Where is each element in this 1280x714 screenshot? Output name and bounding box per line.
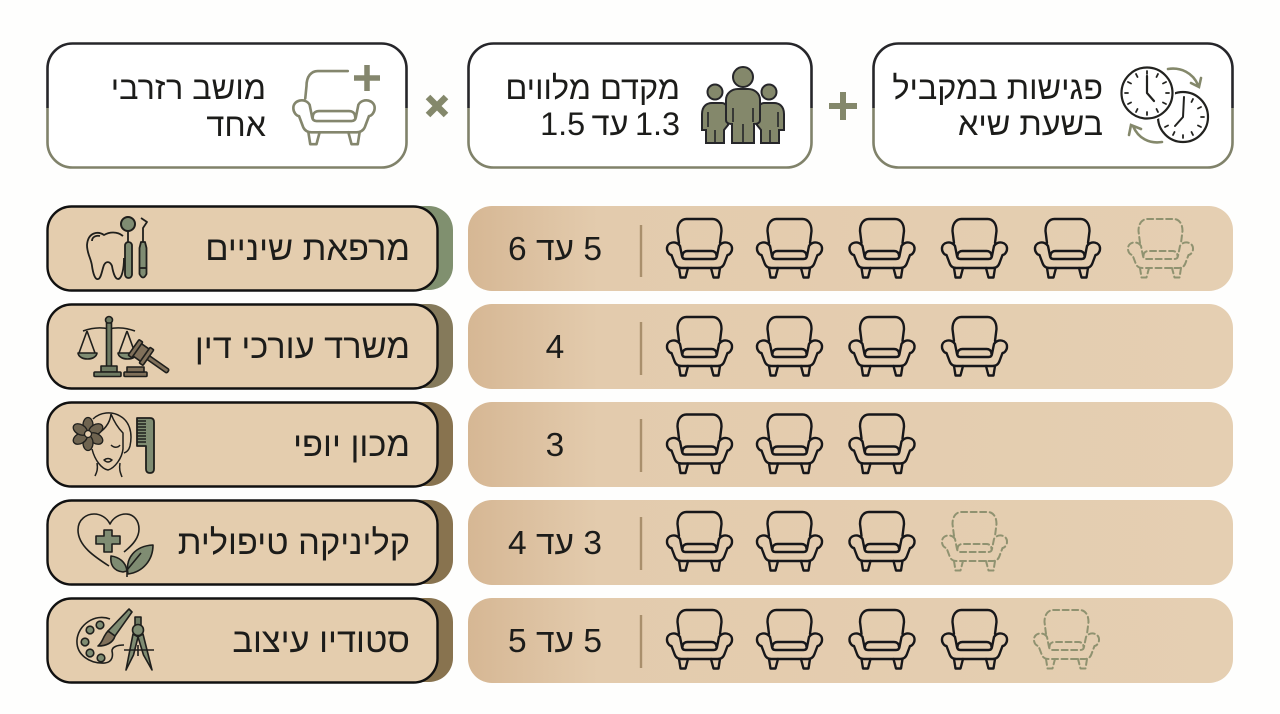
label card: dental clinic: מרפאת שיניים (205, 230, 410, 268)
text: escort factor (505, 70, 680, 142)
panel: parallel meetings (874, 44, 1232, 168)
text: parallel meetings: בשעת שיא (958, 106, 1103, 142)
icon: scales and gavel (78, 316, 173, 379)
value panel: law office: 4 (546, 329, 564, 366)
label card: law office: משרד עורכי דין (195, 328, 410, 366)
icon: palette and compass (77, 609, 154, 670)
panel: escort factor (468, 44, 812, 168)
chairs: 3 (667, 414, 915, 473)
panel: spare seat (48, 44, 406, 168)
value panel: dental clinic (468, 206, 1233, 291)
icon: armchair with plus (293, 65, 380, 144)
chairs: 4 to 5 (667, 610, 1099, 668)
row: therapy clinic (48, 500, 1233, 585)
row: beauty salon (48, 402, 1233, 487)
icon: heart with cross and leaves (78, 514, 153, 577)
label card: therapy clinic: קליניקה טיפולית (178, 524, 410, 562)
label card: design studio (48, 598, 453, 682)
icon: clocks (1119, 65, 1208, 142)
chairs: 5 to 6 (667, 219, 1193, 278)
text: escort factor: מקדם מלווים (505, 70, 680, 106)
operator: times (428, 97, 446, 115)
text: spare seat: מושב רזרבי (111, 70, 266, 106)
text: escort factor: 1.3 עד 1.5 (540, 106, 680, 142)
text: parallel meetings: פגישות במקביל (892, 70, 1103, 106)
label card: law office (48, 304, 453, 388)
value panel: beauty salon: 3 (546, 427, 564, 464)
icon: face, flower and comb (71, 413, 154, 477)
chairs: 4 (667, 317, 1007, 376)
row: design studio (48, 598, 1233, 683)
value panel: design studio: 5 עד 5 (508, 623, 602, 660)
value panel: beauty salon (468, 402, 1233, 487)
label card: dental clinic (48, 206, 453, 290)
operator: plus (829, 92, 857, 120)
row: law office (48, 304, 1233, 389)
value panel: therapy clinic (468, 500, 1233, 585)
value panel: law office (468, 304, 1233, 389)
chairs: 3 to 4 (667, 512, 1007, 570)
row: dental clinic (48, 206, 1233, 291)
value panel: therapy clinic: 3 עד 4 (508, 525, 602, 562)
value panel: dental clinic: 5 עד 6 (508, 231, 602, 268)
text: spare seat (111, 70, 266, 143)
text: spare seat: אחד (206, 107, 266, 143)
label card: beauty salon (48, 402, 453, 486)
label card: beauty salon: מכון יופי (293, 426, 410, 464)
text: parallel meetings (892, 70, 1103, 142)
label card: therapy clinic (48, 500, 453, 584)
icon: family (702, 67, 784, 143)
icon: tooth and tools (87, 217, 147, 279)
label card: design studio: סטודיו עיצוב (232, 622, 410, 660)
value panel: design studio (468, 598, 1233, 683)
